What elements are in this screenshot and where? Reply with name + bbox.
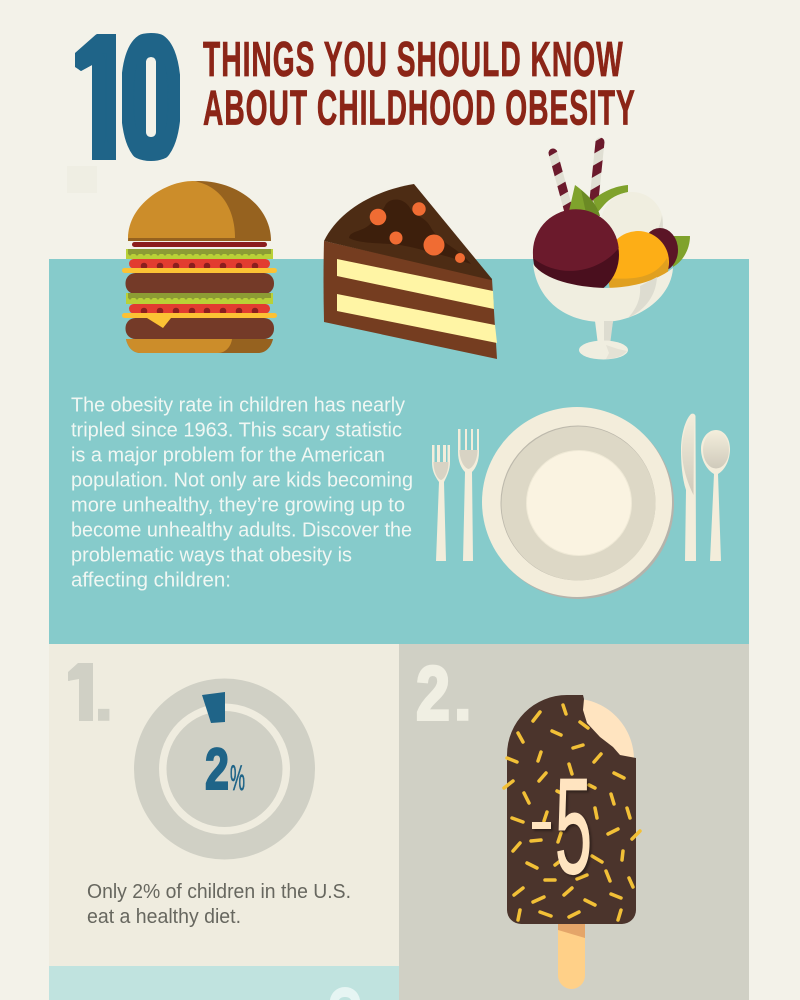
- donut chart: 2 percent: 2: [205, 737, 229, 802]
- panel: fact 1: [49, 644, 399, 966]
- small fork: [432, 445, 450, 561]
- intro text: affecting children:: [71, 570, 231, 592]
- title: ABOUT CHILDHOOD OBESITY: [203, 82, 635, 136]
- panel: fact 3 (cropped): [49, 966, 399, 1000]
- icon: burger: [122, 181, 277, 353]
- panel: intro teal: [49, 259, 749, 644]
- icon: place setting: [432, 407, 730, 599]
- icon: cake slice: [324, 184, 497, 359]
- big number 10: [75, 33, 180, 161]
- title: THINGS YOU SHOULD KNOW: [203, 33, 623, 87]
- intro text: tripled since 1963. This scary statistic: [71, 420, 402, 442]
- icon: ice cream sundae: [533, 142, 690, 360]
- intro text: problematic ways that obesity is: [71, 545, 352, 567]
- number 1: [68, 663, 110, 721]
- plate: [482, 407, 674, 599]
- big number 10: 1: [71, 9, 136, 187]
- spoon: [701, 430, 730, 561]
- donut chart: 2 percent: %: [230, 759, 245, 798]
- icon: popsicle: 5: [555, 750, 592, 902]
- minus 5 label: [532, 750, 592, 902]
- number 1: .: [94, 657, 113, 735]
- intro text: [71, 395, 413, 592]
- knife: [681, 414, 696, 561]
- fact 1 text: eat a healthy diet.: [87, 906, 241, 928]
- intro text: more unhealthy, they’re growing up to: [71, 495, 405, 517]
- number 1: 1: [64, 647, 104, 735]
- icon: popsicle: [504, 695, 640, 989]
- intro text: population. Not only are kids becoming: [71, 470, 413, 492]
- number 2: .: [453, 657, 472, 735]
- large fork: [458, 429, 479, 561]
- big number 10: 0: [123, 9, 179, 187]
- fact 1 text: [87, 881, 351, 928]
- number 2: 2: [416, 652, 450, 736]
- title: [203, 33, 635, 136]
- intro text: The obesity rate in children has nearly: [71, 395, 405, 417]
- intro text: become unhealthy adults. Discover the: [71, 520, 412, 542]
- panel: fact 2: [399, 644, 749, 1000]
- donut chart: 2 percent: [134, 678, 315, 860]
- fact 1 text: Only 2% of children in the U.S.: [87, 881, 351, 903]
- icon: cropped pale circle: [330, 987, 360, 1000]
- intro text: is a major problem for the American: [71, 445, 385, 467]
